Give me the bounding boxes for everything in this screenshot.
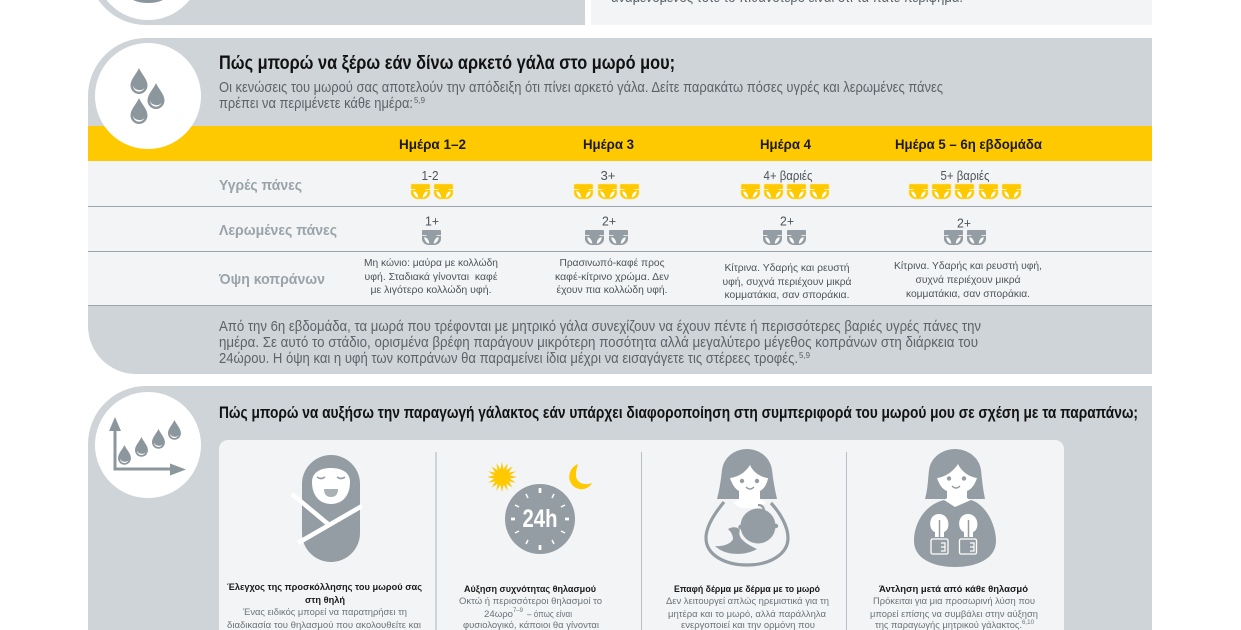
icon: 24 hour clock [505,484,575,554]
icon: cropped circle [95,0,201,20]
tip 3 text: Επαφή δέρμα με δέρμα με το μωρό [674,584,820,595]
description: day 4: κομματάκια, σαν σποράκια. [724,289,850,301]
value: 2+: 2+ [602,214,616,228]
tip 4 text: 6,10 [1022,619,1034,626]
value: 4+ heavy [741,169,829,199]
tip 2 text [459,584,602,630]
intro text: Οι κενώσεις του μωρού σας αποτελούν την απόδειξη ότι πίνει αρκετό γάλα. Δείτε παρακάτω πόσες υγρές και λερωμένες πάνες [219,79,943,96]
tip 4 text [870,584,1038,630]
value: 1+: 1+ [425,214,439,228]
description: day 3 [555,257,669,296]
intro text: 5,9 [414,95,425,105]
description: day 5 to week 6 [894,260,1042,300]
value: 2+: 2+ [957,216,971,230]
description: day 5 to week 6: συχνά περιέχουν μικρά [916,274,1020,286]
value: 2+ [763,214,806,245]
description: day 3: Πρασινωπό-καφέ προς [560,257,664,269]
heading: Πώς μπορώ να ξέρω εάν δίνω αρκετό γάλα στο μωρό μου; [219,53,675,74]
note below table: 5,9 [799,350,810,360]
table row: dirty nappies [88,207,1152,251]
value: 2+ [944,216,986,245]
icon: moon [569,464,592,489]
column header: day 3: Ημέρα 3 [583,136,634,152]
row label: Λερωμένες πάνες [219,222,337,239]
tip 2 text: – όπως είναι [527,609,572,620]
icon: three drops [95,43,201,149]
note below table: 24ώρου. Η όψη και η υφή των κοπράνων θα παραμείνει ίδια μέχρι να εισαγάγετε τις στέρεες τροφές. [219,350,798,367]
icon: swaddled baby [292,455,362,562]
note below table [219,318,981,367]
tip 4 text: Πρόκειται για μια προσωρινή λύση που [873,596,1035,607]
value: 1-2 [411,169,453,199]
column header: day 1-2: Ημέρα 1–2 [399,136,466,152]
description: day 3: καφέ-κίτρινο χρώμα. Δεν [555,271,669,283]
description: day 5 to week 6: Κίτρινα. Υδαρής και ρευστή υφή, [894,260,1042,272]
tip 1 text: Έλεγχος της προσκόλλησης του μωρού σας [227,582,422,593]
icon: rising drops chart [95,392,201,498]
icon: mother with breast pumps [914,449,996,567]
note below table: Από την 6η εβδομάδα, τα μωρά που τρέφονται με μητρικό γάλα συνεχίζουν να έχουν πέντε ή περισσότερες βαριές υγρές πάνες την [219,318,981,335]
table row: wet nappies [88,161,1152,206]
panel: how to increase milk production [88,386,1152,630]
tip 4 text: Άντληση μετά από κάθε θηλασμό [879,584,1028,595]
column header: day 5 to week 6: Ημέρα 5 – 6η εβδομάδα [895,136,1042,152]
panel: top right (cropped) [591,0,1152,25]
tip 4 text: μπορεί επίσης να συμβάλει στην αύξηση [870,609,1038,620]
tip 2 text: Αύξηση συχνότητας θηλασμού [464,584,596,595]
tip 3 text: μητέρα και το μωρό, αλλά παράλληλα [668,609,826,620]
value: 5+ heavy: 5+ βαριές [940,169,990,183]
icon: 24 hour clock: 24h [522,505,558,533]
intro text [219,79,943,112]
panel: how to know baby gets enough milk [88,38,1152,374]
value: 2+: 2+ [780,214,794,228]
intro text: πρέπει να περιμένετε κάθε ημέρα: [219,95,413,112]
tip 1 text [227,582,422,630]
tip 2 text: 24ωρο [484,609,513,620]
icon: mother and baby skin to skin [706,449,788,565]
table row: stool appearance [88,252,1152,305]
table header band [88,126,1152,161]
tip 2 text: Οκτώ ή περισσότεροι θηλασμοί το [459,596,602,607]
note below table: ημέρα. Σε αυτό το στάδιο, ορισμένα βρέφη παράγουν μικρότερη ποσότητα αλλά μεγαλύτερο μέγεθος κοπράνων στη διάρκεια του [219,334,978,351]
description: day 1-2: Μη κώνιο: μαύρα με κολλώδη [364,257,498,269]
value: 2+ [585,214,628,245]
description: day 1-2: υφή. Σταδιακά γίνονται καφέ [364,271,498,283]
value: 1+ [422,214,441,245]
icon: sun [487,462,517,492]
panel: top left (cropped) [88,0,585,25]
description: day 3: έχουν πια κολλώδη υφή. [556,284,668,296]
value: 4+ heavy: 4+ βαριές [764,169,812,183]
row label: Όψη κοπράνων [218,271,325,288]
description: day 1-2: με λιγότερο κολλώδη υφή. [370,284,492,296]
description: day 4 [722,262,852,301]
tip 3 text [666,584,829,630]
row label: Υγρές πάνες [219,177,302,194]
column header: day 4: Ημέρα 4 [760,136,811,152]
value: 5+ heavy [909,169,1021,199]
tip 1 text: στη θηλή [305,595,345,606]
description: day 1-2 [364,257,498,296]
tip 1 text: Ένας ειδικός μπορεί να παρατηρήσει τη [242,607,407,618]
value: 3+ [574,169,639,199]
card: four tips [219,440,1064,630]
value: 3+: 3+ [600,169,616,183]
value: 1-2: 1-2 [422,169,439,183]
tip 3 text: Δεν λειτουργεί απλώς ηρεμιστικά για τη [666,596,829,607]
description: day 5 to week 6: κομματάκια, σαν σποράκια. [906,288,1030,300]
description: day 4: υφή, συχνά περιέχουν μικρά [722,276,852,288]
description: day 4: Κίτρινα. Υδαρής και ρευστή [724,262,850,274]
tip 2 text: 7–9 [513,607,523,614]
